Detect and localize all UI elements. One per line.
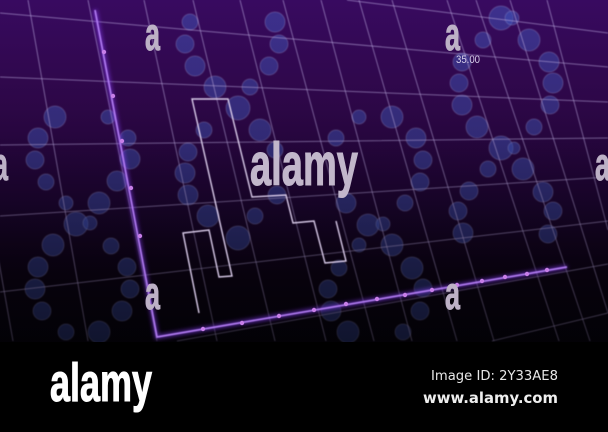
watermark letters: a: [145, 8, 160, 60]
website url: www.alamy.com: [423, 389, 558, 407]
watermark letters: a: [445, 8, 460, 60]
centre watermark wordmark: alamy: [250, 131, 358, 198]
violet chart axes: [95, 10, 567, 337]
depth shading: [0, 85, 608, 342]
footer logo: alamy: [50, 353, 152, 413]
image id: Image ID: 2Y33AE8: [431, 369, 558, 384]
chart value label: 35.00: [456, 54, 480, 66]
chart background panel: [0, 0, 608, 342]
violet axis glow: [95, 10, 567, 337]
axis markers: [102, 50, 549, 331]
perspective grid: [0, 0, 608, 341]
scene: grid, bubbles and chart: [0, 0, 608, 343]
bubble cluster: [25, 6, 563, 343]
watermark letters: [0, 8, 608, 319]
white step line chart: [183, 99, 346, 313]
footer bar: [0, 342, 608, 432]
watermark letters: a: [145, 267, 160, 319]
watermark letters: a: [445, 267, 460, 319]
